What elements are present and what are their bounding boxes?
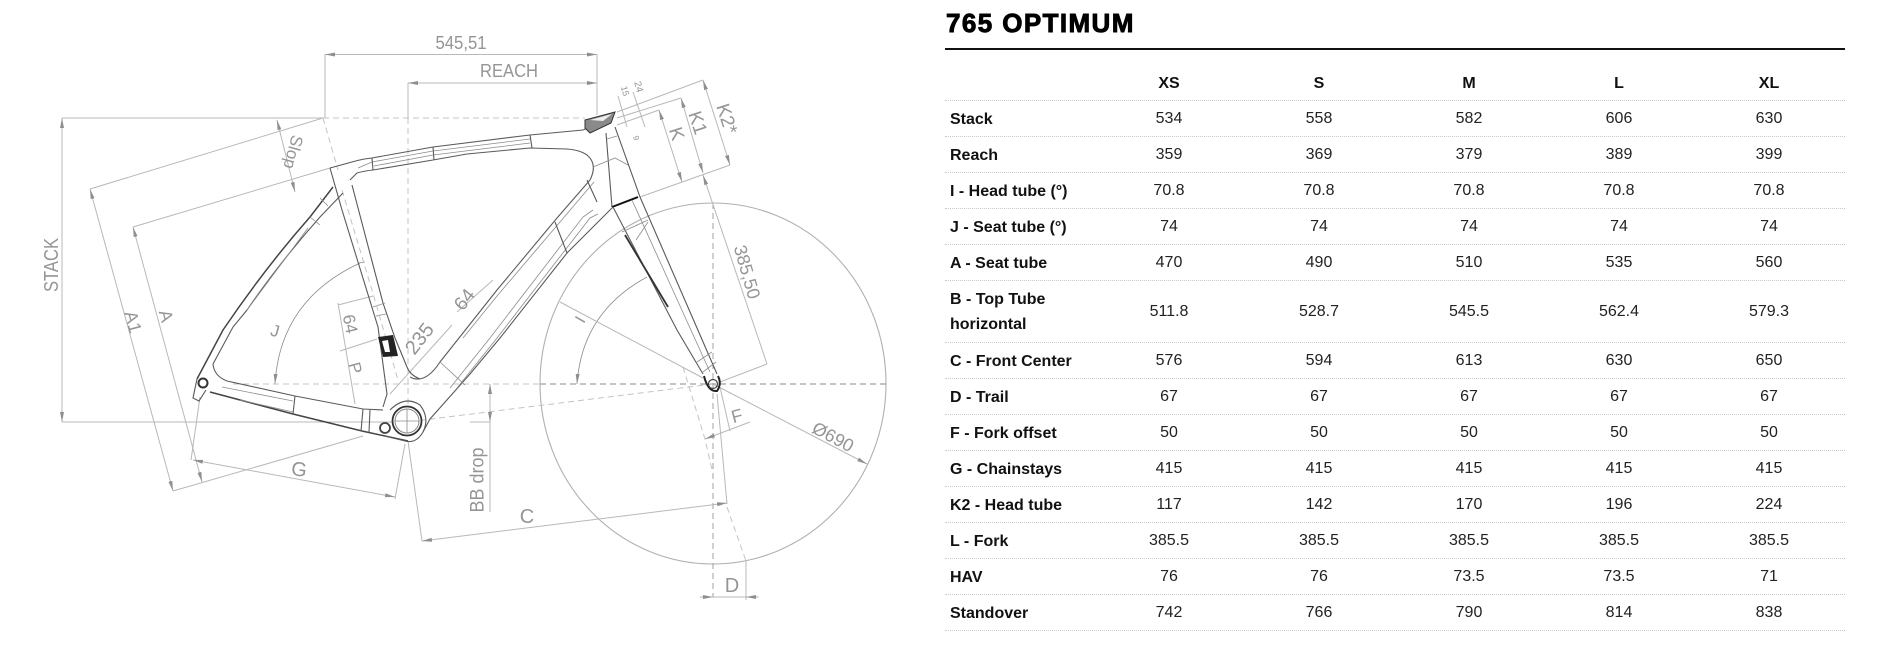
row: Trail (945, 379, 1845, 415)
bike frame (193, 112, 720, 442)
row: Front center: 576 (1156, 352, 1182, 369)
dimension: stack: STACK (41, 237, 63, 292)
dimension: 64 and P: P (344, 360, 366, 376)
row: Head tube angle: I - Head tube (°) (950, 182, 1068, 200)
row: Front center: 630 (1606, 352, 1632, 369)
row: Top tube horizontal: 579.3 (1749, 303, 1789, 320)
row: Stack: 630 (1756, 110, 1782, 127)
dimension: K2 (617, 80, 741, 197)
row: HAV: 73.5 (1453, 568, 1485, 585)
frame geometry diagram (41, 33, 886, 600)
dimension: 64 and P: 64 (339, 313, 361, 335)
row: Trail: 67 (1460, 388, 1478, 405)
dimension: L fork 385,50 (703, 175, 767, 382)
row: HAV: HAV (950, 568, 983, 586)
head tube (593, 127, 640, 207)
dimension: wheel diameter 690 (713, 384, 867, 464)
row: Head tube length: 117 (1156, 496, 1182, 513)
row: Head tube length: 170 (1456, 496, 1482, 513)
row: Seat tube angle: J - Seat tube (°) (950, 218, 1067, 236)
dimension: K1: K1 (683, 109, 711, 137)
row: Head tube angle: 70.8 (1303, 182, 1335, 199)
row: Fork offset (945, 415, 1845, 451)
row: Top tube horizontal: 511.8 (1150, 303, 1188, 320)
row: Standover: 742 (1156, 604, 1182, 621)
dimension: G (191, 397, 405, 499)
dimension: C (408, 394, 727, 541)
row: Reach: 379 (1456, 146, 1482, 163)
row: Head tube angle (945, 173, 1845, 209)
row: Standover: 814 (1606, 604, 1632, 621)
dimension: 235 and 64: 64 (450, 285, 480, 315)
table header: XS (1158, 74, 1180, 92)
dimension: 545,51: 545,51 (436, 33, 486, 53)
row: Fork: 385.5 (1749, 532, 1789, 549)
row: Trail: 67 (1610, 388, 1628, 405)
dimension: L fork 385,50: 385,50 (730, 243, 764, 301)
dimension: D: D (725, 575, 739, 597)
dimension: I angle (560, 277, 703, 384)
row: Standover: Standover (950, 604, 1028, 622)
dimensions: headset stack 15, 24, 9: 9 (631, 135, 641, 142)
row: Stack: 582 (1456, 110, 1482, 127)
row: Head tube length: 196 (1606, 496, 1632, 513)
row: Top tube horizontal: 545.5 (1449, 303, 1489, 320)
row: Seat tube: 560 (1756, 254, 1782, 271)
row: Standover (945, 595, 1845, 631)
top tube (330, 124, 598, 180)
row: Chainstays (945, 451, 1845, 487)
row: Front center: C - Front Center (950, 352, 1072, 370)
bottom bracket (380, 401, 426, 442)
dimension: I angle: I (573, 314, 589, 326)
dimension: D (700, 507, 759, 600)
row: Standover: 838 (1756, 604, 1782, 621)
centre lines (233, 203, 886, 597)
dimension: BB drop (468, 384, 490, 512)
row: Reach: 369 (1306, 146, 1332, 163)
row: Head tube length: 224 (1756, 496, 1782, 513)
row: Fork: 385.5 (1299, 532, 1339, 549)
row: Seat tube (945, 245, 1845, 281)
row: Top tube horizontal: 562.4 (1599, 303, 1639, 320)
dimensions: headset stack 15, 24, 9: 24 (631, 80, 645, 94)
dimension: K (617, 110, 688, 182)
row: Chainstays: 415 (1156, 460, 1182, 477)
row: Seat tube angle: 74 (1760, 218, 1778, 235)
row: Top tube horizontal: B - Top Tube horizontal (950, 291, 1045, 333)
dimension: slop: Slop (279, 133, 307, 171)
row: Trail: D - Trail (950, 388, 1009, 406)
dimension: J angle: J (268, 321, 282, 341)
title: 765 OPTIMUM (946, 8, 1135, 38)
dimension: K2: K2* (711, 101, 741, 137)
row: Trail: 67 (1760, 388, 1778, 405)
seat stays (197, 187, 343, 381)
row: HAV: 76 (1310, 568, 1328, 585)
row: Seat tube angle: 74 (1460, 218, 1478, 235)
row: HAV (945, 559, 1845, 595)
row: Seat tube angle: 74 (1160, 218, 1178, 235)
row: Fork offset: 50 (1610, 424, 1628, 441)
dimensions: headset stack 15, 24, 9 (618, 80, 645, 142)
row: Fork: 385.5 (1599, 532, 1639, 549)
dimension: 235 and 64: 235 (401, 319, 439, 359)
row: Head tube length (945, 487, 1845, 523)
seat tube (330, 168, 420, 407)
dimension: slop (90, 118, 338, 227)
row: Stack: 558 (1306, 110, 1332, 127)
row: Head tube angle: 70.8 (1153, 182, 1185, 199)
dimension: C: C (520, 506, 534, 528)
row: Seat tube angle (945, 209, 1845, 245)
row: Seat tube: 490 (1306, 254, 1332, 271)
row: Stack: 606 (1606, 110, 1632, 127)
row: Fork offset: 50 (1460, 424, 1478, 441)
dimension: 235 and 64 (390, 280, 493, 394)
row: Fork offset: 50 (1760, 424, 1778, 441)
row: Reach (945, 137, 1845, 173)
row: Fork: 385.5 (1449, 532, 1489, 549)
row: Head tube angle: 70.8 (1453, 182, 1485, 199)
row: Trail: 67 (1310, 388, 1328, 405)
row: Seat tube angle: 74 (1610, 218, 1628, 235)
table header: S (1314, 74, 1324, 92)
fork (613, 197, 720, 391)
row: Head tube angle: 70.8 (1603, 182, 1635, 199)
row: Reach: 359 (1156, 146, 1182, 163)
down tube (410, 180, 613, 432)
table header (945, 49, 1845, 101)
row: HAV: 76 (1160, 568, 1178, 585)
dimensions: headset stack 15, 24, 9: 15 (619, 85, 631, 97)
row: Front center: 594 (1306, 352, 1332, 369)
row: Seat tube: A - Seat tube (950, 254, 1047, 272)
row: Fork offset: F - Fork offset (950, 424, 1057, 442)
table header: XL (1759, 74, 1779, 92)
stem (585, 112, 615, 133)
row: Fork (945, 523, 1845, 559)
row: Chainstays: G - Chainstays (950, 460, 1062, 478)
row: Seat tube: 470 (1156, 254, 1182, 271)
row: Front center: 650 (1756, 352, 1782, 369)
rear dropout (193, 378, 208, 401)
dimension: reach: REACH (480, 61, 538, 81)
geometry table (945, 74, 1845, 631)
row: Seat tube angle: 74 (1310, 218, 1328, 235)
dimension: F (683, 367, 750, 474)
dimension: K: K (664, 125, 688, 144)
row: Stack: Stack (950, 110, 993, 128)
row: Stack (945, 101, 1845, 137)
row: Fork offset: 50 (1310, 424, 1328, 441)
row: Standover: 790 (1456, 604, 1482, 621)
row: Trail: 67 (1160, 388, 1178, 405)
row: Front center (945, 343, 1845, 379)
dimension: BB drop: BB drop (468, 448, 488, 512)
dimension: A1 (90, 189, 173, 491)
chainstay (210, 381, 408, 441)
row: Top tube horizontal (945, 281, 1845, 343)
row: Fork offset: 50 (1160, 424, 1178, 441)
row: HAV: 71 (1760, 568, 1778, 585)
dimension: K1 (617, 98, 711, 173)
row: Front center: 613 (1456, 352, 1482, 369)
dimension: A: A (155, 308, 177, 324)
row: Seat tube: 535 (1606, 254, 1632, 271)
row: Stack: 534 (1156, 110, 1182, 127)
row: Chainstays: 415 (1756, 460, 1782, 477)
table header: M (1462, 74, 1476, 92)
row: Head tube angle: 70.8 (1753, 182, 1785, 199)
row: Fork: 385.5 (1149, 532, 1189, 549)
row: Standover: 766 (1306, 604, 1332, 621)
row: Reach: 389 (1606, 146, 1632, 163)
row: HAV: 73.5 (1603, 568, 1635, 585)
row: Head tube length: K2 - Head tube (950, 496, 1062, 514)
dimension: F: F (729, 405, 745, 427)
row: Chainstays: 415 (1456, 460, 1482, 477)
row: Seat tube: 510 (1456, 254, 1482, 271)
row: Chainstays: 415 (1606, 460, 1632, 477)
table header: L (1614, 74, 1624, 92)
row: Head tube length: 142 (1306, 496, 1332, 513)
row: Top tube horizontal: 528.7 (1299, 303, 1339, 320)
row: Reach: 399 (1756, 146, 1782, 163)
row: Fork: L - Fork (950, 532, 1008, 550)
dimension: J angle (268, 263, 360, 384)
dimension: A1: A1 (120, 309, 146, 335)
dimension: wheel diameter 690: Ø690 (809, 418, 857, 456)
row: Chainstays: 415 (1306, 460, 1332, 477)
dimension: A (133, 227, 363, 491)
row: Reach: Reach (950, 146, 998, 164)
dimension: G: G (290, 458, 308, 482)
dimension: 64 and P (338, 296, 377, 404)
wheel circle (540, 203, 886, 564)
